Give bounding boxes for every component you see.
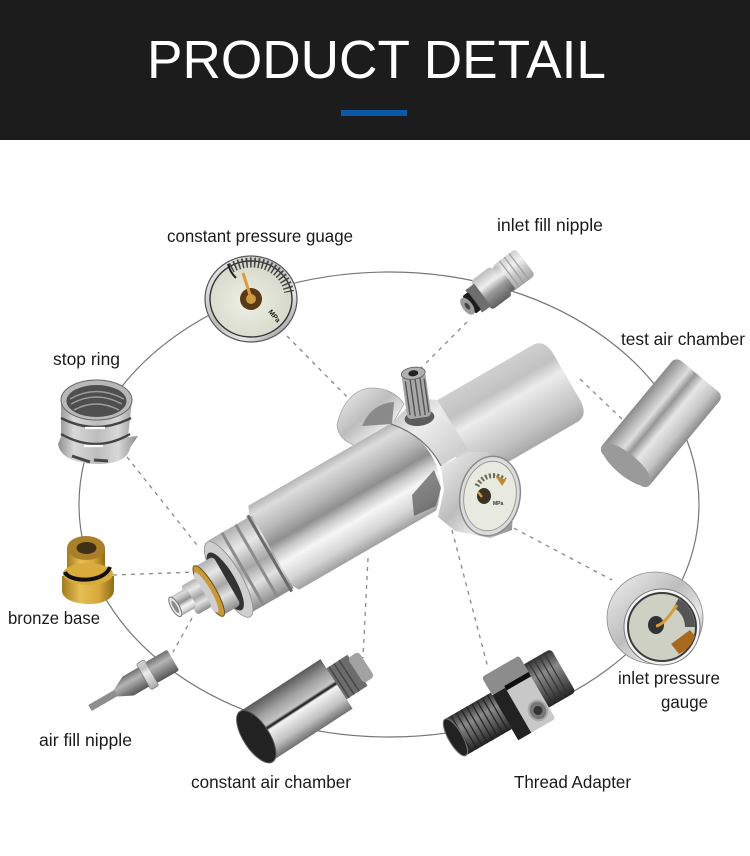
outer connecting ring [79,272,699,737]
title: PRODUCT DETAIL [147,30,606,90]
header banner [0,0,750,140]
blue accent bar [341,110,407,116]
part: inlet pressure gauge [607,572,703,665]
label: constant air chamber: constant air chamber [191,772,351,792]
ribbed collar [207,514,295,615]
inner tube [192,556,241,617]
label: bronze base: bronze base [8,608,100,628]
part: stop ring [58,380,138,464]
label: inlet pressure gauge [618,668,720,712]
fill valve on top [398,365,435,428]
main regulator assembly [146,338,589,650]
label: air fill nipple: air fill nipple [39,730,132,750]
label: test air chamber: test air chamber [621,329,745,349]
part: thread adapter [430,640,582,770]
saddle band [391,398,468,466]
nozzle collar [181,578,212,615]
part: bronze base [62,536,114,604]
label: constant pressure guage: constant pressure guage [167,226,353,246]
label: Thread Adapter: Thread Adapter [514,772,631,792]
front gauge: MPa [493,501,504,507]
hex nut of front gauge [438,452,515,538]
right cylinder [427,338,589,483]
front flange [196,536,261,623]
part: air fill nipple [82,647,181,721]
part: constant pressure gauge: MPa [266,309,281,324]
left cylinder [146,414,457,650]
dashed leader lines [113,322,622,668]
part: inlet fill nipple [453,248,537,324]
label: inlet pressure gauge: inlet pressure [618,668,720,688]
reflection under band [412,470,441,516]
part: test air chamber [595,356,724,493]
label: inlet fill nipple: inlet fill nipple [497,215,603,235]
brass ring [188,562,229,620]
constant pressure knob behind body [337,388,404,446]
part: constant air chamber [229,640,383,769]
label: inlet pressure gauge: gauge [661,692,708,712]
front gauge [454,451,526,541]
nozzle tip [168,588,197,617]
part: constant pressure gauge [205,256,297,342]
label: stop ring: stop ring [53,349,120,369]
